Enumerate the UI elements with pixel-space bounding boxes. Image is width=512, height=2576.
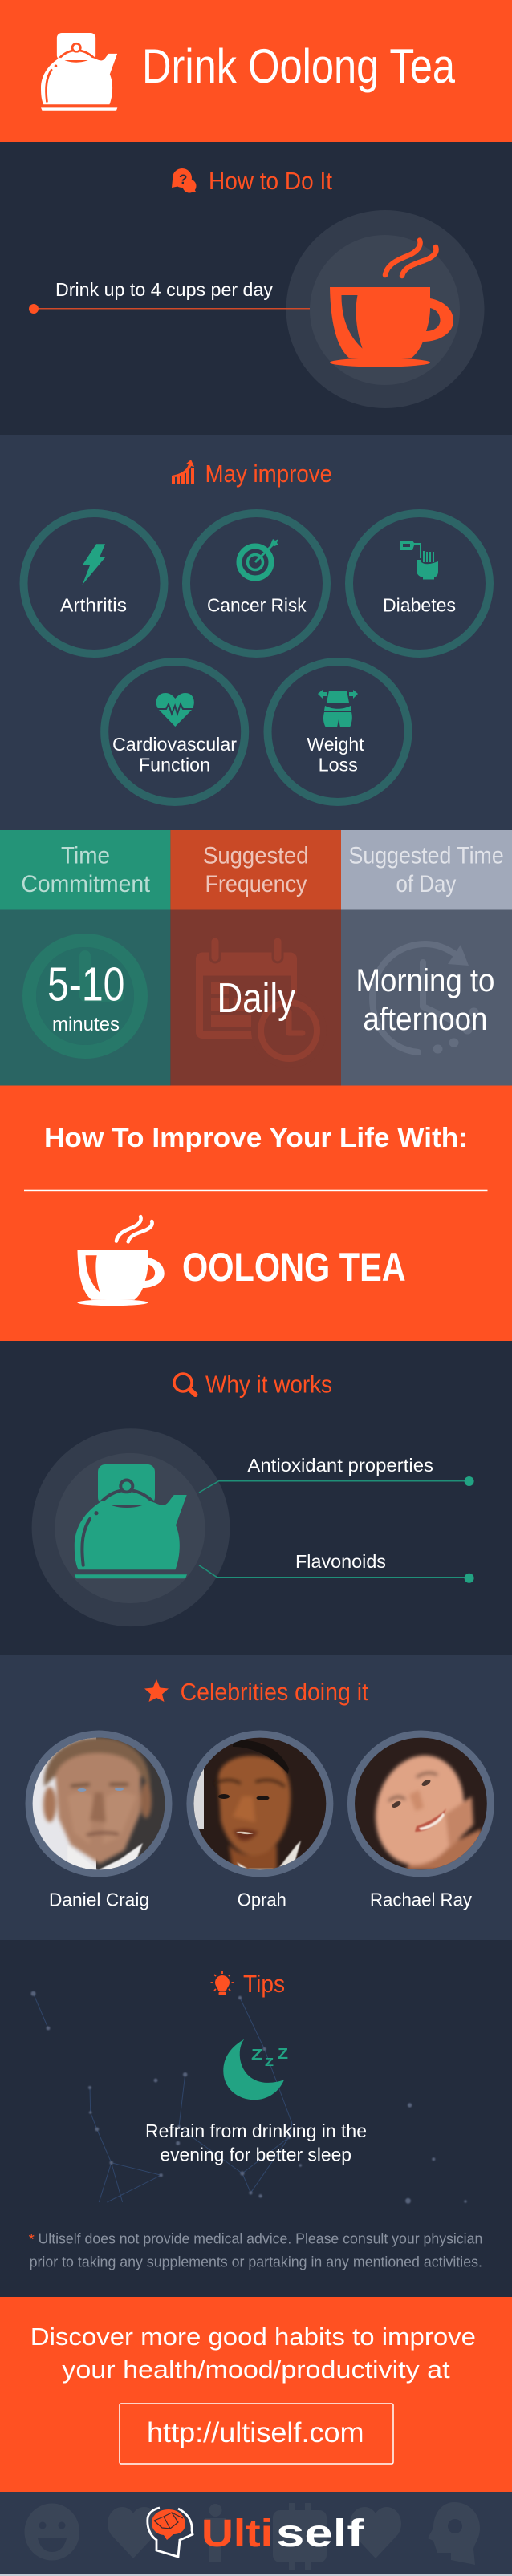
icon: faded clock bbox=[29, 940, 141, 1052]
panel: call to action bbox=[0, 2297, 512, 2492]
panel: footer bbox=[0, 2492, 512, 2576]
icon: orange cup bbox=[330, 241, 453, 367]
icon: magnifier bbox=[174, 1374, 196, 1395]
heading: why it works: Why it works bbox=[205, 1371, 332, 1399]
callout: drink up to 4 cups: Drink up to 4 cups per day bbox=[55, 279, 273, 300]
heading: tips: Tips bbox=[243, 1970, 285, 1998]
heading: may improve: May improve bbox=[205, 460, 332, 488]
disclaimer: * bbox=[29, 2231, 35, 2249]
photo: oprah bbox=[186, 1731, 333, 1877]
item: diabetes bbox=[349, 513, 490, 654]
label: antioxidant properties bbox=[247, 1455, 474, 1486]
panel: celebrities doing it bbox=[0, 1655, 512, 1940]
cta text: your health/mood/productivity at bbox=[62, 2355, 450, 2384]
item: cancer risk bbox=[186, 513, 327, 654]
icon: moon with zzz bbox=[223, 2039, 288, 2100]
logo: ultiself: self bbox=[276, 2513, 365, 2555]
value: 5-10 minutes: 5-10 bbox=[47, 958, 124, 1011]
heading: suggested frequency: Frequency bbox=[205, 871, 307, 897]
panel: how to improve banner bbox=[0, 1086, 512, 1341]
connector lines bbox=[199, 1481, 465, 1578]
icon: rising chart bbox=[172, 460, 194, 484]
icon: light bulb bbox=[210, 1971, 234, 1995]
item: cardiovascular function: Function bbox=[139, 755, 210, 776]
panel: how to do it bbox=[0, 142, 512, 435]
panel: tips bbox=[0, 1940, 512, 2297]
icon: teal kettle bbox=[75, 1464, 187, 1578]
starfield background bbox=[30, 1991, 467, 2204]
icon: moon with zzz: Z bbox=[265, 2056, 274, 2069]
disclaimer bbox=[29, 2230, 482, 2270]
concentric circles bbox=[32, 1428, 230, 1626]
label: daniel craig: Daniel Craig bbox=[49, 1889, 149, 1910]
icon: question bubbles: ? bbox=[179, 172, 187, 187]
heading: suggested frequency bbox=[203, 842, 308, 897]
logo: ultiself bbox=[148, 2508, 365, 2557]
label: rachael ray: Rachael Ray bbox=[370, 1889, 472, 1910]
item: cancer risk: Cancer Risk bbox=[207, 595, 307, 616]
heading: suggested frequency: Suggested bbox=[203, 842, 308, 869]
item: arthritis bbox=[24, 513, 164, 654]
callout: drink up to 4 cups bbox=[29, 279, 310, 314]
label: oprah: Oprah bbox=[238, 1889, 286, 1910]
heading: how to do it: How to Do It bbox=[209, 167, 332, 195]
url button: http://ultiself.com bbox=[147, 2417, 364, 2448]
icon: star bbox=[144, 1679, 169, 1702]
label: flavonoids: Flavonoids bbox=[295, 1551, 386, 1572]
panel: time commitment bbox=[0, 830, 170, 1086]
label: flavonoids bbox=[295, 1551, 474, 1583]
panel: header bbox=[0, 0, 512, 142]
heading: suggested time of day bbox=[348, 842, 504, 897]
item: cardiovascular function bbox=[104, 662, 245, 802]
item: weight loss bbox=[268, 662, 408, 802]
tip text bbox=[145, 2120, 367, 2165]
title: Drink Oolong Tea bbox=[142, 39, 456, 93]
icon: faded cycle clock bbox=[372, 944, 474, 1052]
icon: white kettle bbox=[41, 33, 117, 111]
item: cardiovascular function: Cardiovascular bbox=[112, 734, 237, 755]
logo: ultiself: Ulti bbox=[201, 2513, 273, 2555]
label: antioxidant properties: Antioxidant properties bbox=[247, 1455, 433, 1476]
heading: oolong tea: OOLONG TEA bbox=[182, 1245, 406, 1290]
concentric circles with cup bbox=[286, 210, 485, 408]
photo: daniel craig bbox=[26, 1731, 172, 1877]
icon: moon with zzz: Z bbox=[251, 2047, 263, 2063]
tip text: evening for better sleep bbox=[160, 2144, 351, 2165]
tip text: Refrain from drinking in the bbox=[145, 2120, 367, 2141]
value: morning to afternoon: Morning to bbox=[356, 963, 494, 998]
disclaimer: prior to taking any supplements or partaking in any mentioned activities. bbox=[30, 2254, 482, 2270]
item: diabetes: Diabetes bbox=[383, 595, 456, 616]
disclaimer: Ultiself does not provide medical advice. Please consult your physician bbox=[39, 2230, 482, 2246]
item: weight loss: Loss bbox=[319, 755, 358, 776]
ghost icons bbox=[25, 2502, 480, 2570]
value: 5-10 minutes bbox=[47, 958, 124, 1035]
heading: time commitment: Commitment bbox=[21, 871, 151, 897]
icon: faded calendar with clock bbox=[196, 937, 327, 1068]
heading: suggested time of day: of Day bbox=[396, 871, 456, 897]
cta text bbox=[30, 2323, 476, 2384]
value: morning to afternoon bbox=[356, 963, 494, 1037]
heading: celebrities doing it: Celebrities doing it bbox=[181, 1678, 368, 1706]
panel: may improve bbox=[0, 435, 512, 830]
icon: moon with zzz: Z bbox=[278, 2046, 288, 2062]
panel: suggested frequency bbox=[170, 830, 341, 1086]
icon: white cup bbox=[77, 1217, 165, 1306]
icon: question bubbles bbox=[172, 168, 196, 192]
heading: how to improve your life with: How To Improve Your Life With: bbox=[44, 1123, 468, 1153]
heading: time commitment bbox=[21, 842, 151, 897]
value: daily: Daily bbox=[217, 975, 295, 1022]
heading: time commitment: Time bbox=[61, 842, 110, 869]
item: weight loss: Weight bbox=[307, 734, 364, 755]
item: arthritis: Arthritis bbox=[60, 595, 127, 616]
cta text: Discover more good habits to improve bbox=[30, 2323, 476, 2351]
photo: rachael ray bbox=[347, 1731, 494, 1877]
panel: suggested time of day bbox=[341, 830, 512, 1086]
url button bbox=[120, 2404, 393, 2464]
value: 5-10 minutes: minutes bbox=[52, 1014, 120, 1035]
value: morning to afternoon: afternoon bbox=[363, 1002, 487, 1037]
panel: why it works bbox=[0, 1341, 512, 1655]
